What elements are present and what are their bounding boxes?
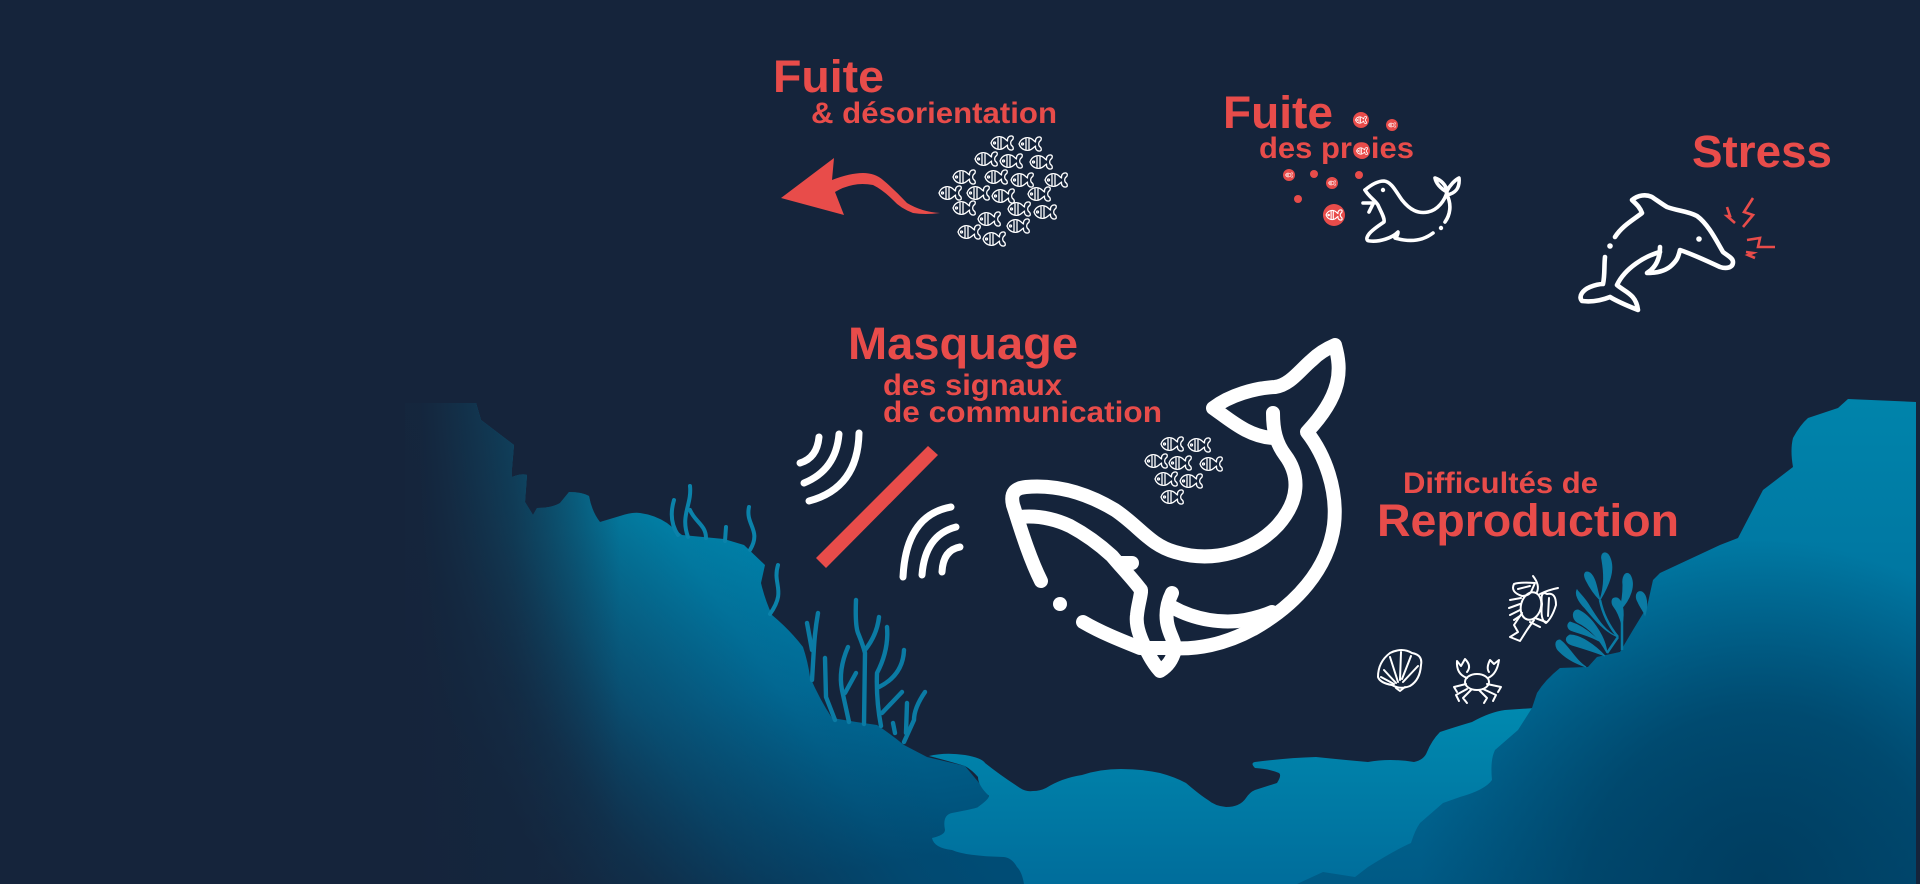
heading: Masquage des signaux de communication: des signaux	[883, 369, 1062, 402]
coral: branching coral	[807, 600, 925, 742]
heading: Fuite & désorientation	[773, 51, 1057, 130]
heading: Fuite des proies: des proies	[1259, 132, 1414, 165]
icon: whale	[1012, 345, 1339, 671]
heading: Masquage des signaux de communication: de communication	[883, 396, 1162, 429]
heading: Fuite & désorientation: & désorientation	[811, 97, 1057, 130]
icon: stress bolts	[1727, 198, 1775, 258]
icon: sound waves emitted	[800, 433, 859, 501]
fish school: fleeing	[939, 136, 1067, 246]
icon: lobster	[1509, 576, 1558, 641]
arrow: flight	[781, 158, 940, 215]
seabed: left cliff	[405, 403, 1040, 884]
icon: dolphin	[1581, 195, 1733, 310]
whale eye	[1053, 597, 1067, 611]
heading: Difficultés de Reproduction: Difficultés de	[1403, 467, 1598, 500]
heading: Masquage des signaux de communication	[848, 318, 1162, 429]
icon: seal	[1363, 178, 1459, 241]
heading: Fuite des proies	[1223, 87, 1414, 165]
icon: sound waves received	[903, 507, 960, 577]
icon: shell	[1378, 650, 1421, 691]
heading: Difficultés de Reproduction: Reproduction	[1377, 495, 1679, 546]
heading: Fuite des proies: Fuite	[1223, 87, 1333, 138]
icon: crab	[1454, 659, 1501, 703]
seaweed: ridge tufts	[672, 486, 778, 614]
prey bubbles	[1283, 112, 1398, 226]
heading: Masquage des signaux de communication: Masquage	[848, 318, 1078, 369]
heading: Difficultés de Reproduction	[1377, 467, 1679, 546]
fish school: near whale	[1145, 437, 1222, 504]
heading: Stress: Stress	[1692, 126, 1832, 177]
seaweed: kelp	[1556, 553, 1647, 667]
blocking bar	[816, 446, 938, 568]
seabed: middle layer	[929, 708, 1560, 884]
seabed: right cliff	[1297, 399, 1916, 884]
heading: Fuite & désorientation: Fuite	[773, 51, 884, 102]
